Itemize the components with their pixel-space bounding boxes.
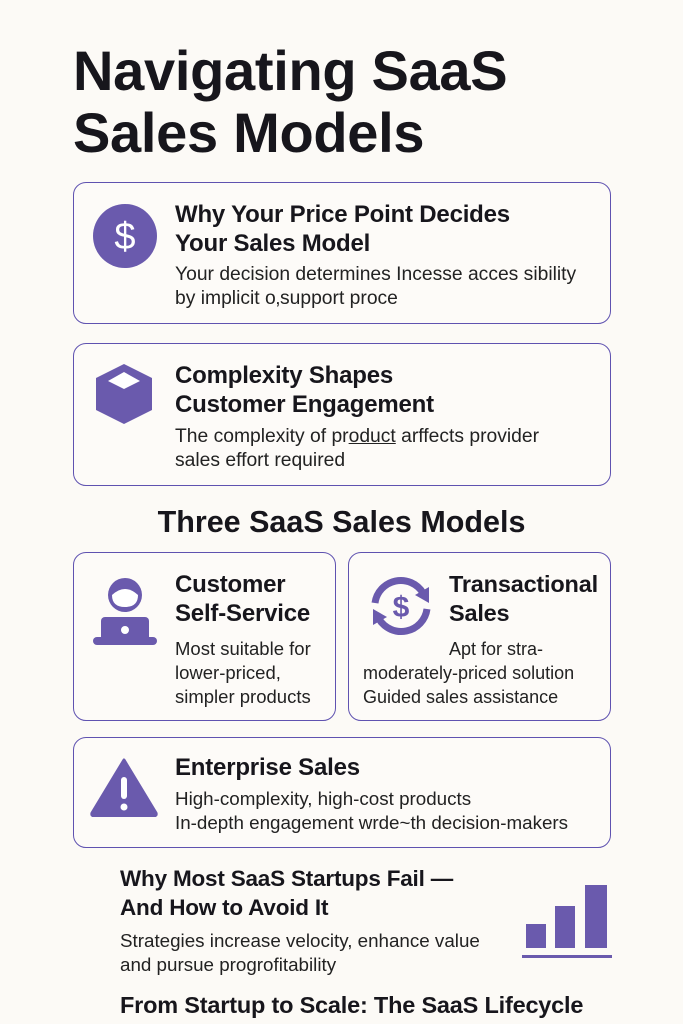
section heading: Three SaaS Sales Models [158,505,525,539]
icon: cycle dollar: $ [393,591,410,624]
heading: why startups fail: And How to Avoid It [120,895,328,920]
icon: dollar circle [93,204,157,268]
body text: lower-priced, [175,662,281,683]
icon: dollar circle: $ [114,216,136,258]
body text [363,639,574,707]
heading: why startups fail: Why Most SaaS Startups Fail — [120,866,453,891]
heading: Self-Service [175,600,310,627]
body text: strategies: Strategies increase velocity, enhance value [120,930,480,951]
icon: cycle dollar [372,577,430,635]
icon: warning triangle [90,758,158,817]
body text [175,788,568,833]
heading [175,571,310,627]
body text: The complexity of product arffects provider [175,426,539,447]
panel: transactional [348,552,611,721]
panel: complexity [73,343,611,486]
heading: Customer Engagement [175,391,434,418]
icon: person laptop [93,578,157,645]
heading: Why Your Price Point Decides [175,201,510,228]
panel: price point [73,182,611,324]
body text: sales effort required [175,450,345,471]
body text: Your decision determines Incesse acces sibility [175,264,576,285]
heading [175,201,510,257]
heading [449,571,598,626]
icon: bar chart [522,885,612,958]
body text: Most suitable for [175,638,311,659]
title [73,39,507,164]
body text: moderately-priced solution [363,663,574,683]
title: Navigating SaaS [73,39,507,102]
heading: Complexity Shapes [175,362,393,389]
body text: strategies [120,930,480,975]
body text: Apt for stra- [449,639,543,659]
heading [175,362,434,418]
body text: by implicit o‚support proce [175,288,398,309]
body text: In-depth engagement wrde~th decision-makers [175,812,568,833]
body text [175,426,539,471]
body text [175,264,576,309]
heading: Transactional [449,571,598,597]
panel: enterprise [73,737,611,848]
heading: Sales [449,600,509,626]
heading: Your Sales Model [175,230,370,257]
heading: Enterprise Sales [175,754,360,781]
body text: High-complexity, high-cost products [175,788,471,809]
panel: self-service [73,552,336,721]
footer heading: From Startup to Scale: The SaaS Lifecycle [120,992,583,1018]
body text: Guided sales assistance [363,687,558,707]
body text [175,638,311,707]
body text: strategies: and pursue progrofitability [120,954,336,975]
icon: cube [96,364,152,424]
heading: why startups fail [120,866,454,920]
heading: Customer [175,571,285,598]
title: Sales Models [73,101,424,164]
body text: simpler products [175,686,311,707]
